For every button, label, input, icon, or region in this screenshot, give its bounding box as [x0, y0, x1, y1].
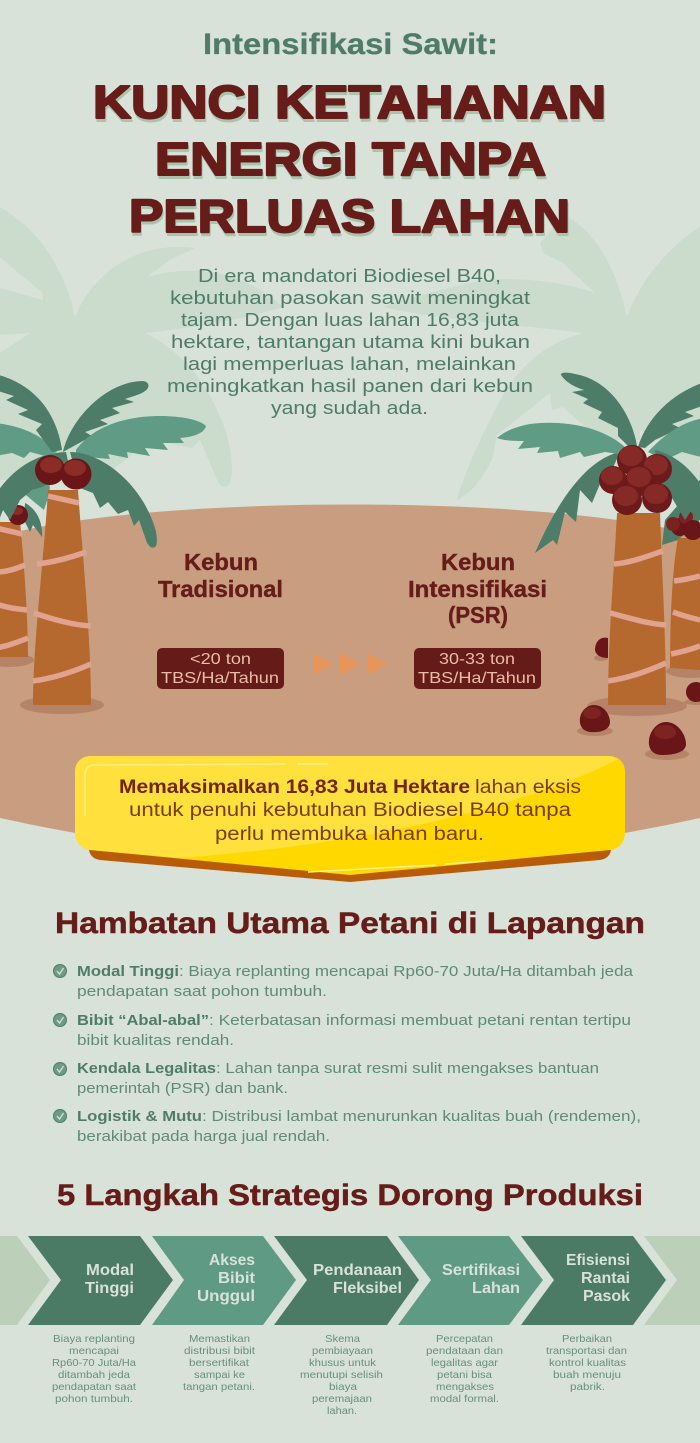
step description	[426, 1333, 503, 1405]
lower left leaf	[535, 452, 620, 553]
step 1	[28, 1236, 173, 1405]
step description: modal formal.	[430, 1393, 499, 1405]
trunk	[0, 522, 28, 657]
chevron	[398, 1236, 543, 1325]
step description	[546, 1333, 627, 1393]
intro paragraph: tajam. Dengan luas lahan 16,83 juta	[181, 309, 520, 330]
step description: Biaya replanting	[53, 1333, 135, 1345]
upper left leaf	[561, 373, 637, 446]
leaf	[662, 480, 700, 545]
back right palm	[662, 480, 700, 678]
step description	[183, 1333, 255, 1393]
step 5	[521, 1236, 666, 1393]
step description: mencapai	[69, 1345, 119, 1357]
trunk	[670, 538, 700, 670]
label: Intensifikasi	[408, 576, 547, 602]
item: legalitas: Kendala Legalitas	[77, 1060, 216, 1077]
fruit 4	[684, 682, 700, 705]
check icon	[54, 1014, 66, 1026]
back left palm	[0, 487, 50, 667]
check icon	[54, 1062, 66, 1076]
kicker: Intensifikasi Sawit:	[203, 28, 498, 61]
intro paragraph: lagi memperluas lahan, melainkan	[183, 353, 516, 374]
step description: khusus untuk	[309, 1357, 377, 1369]
item: bibit: bibit kualitas rendah.	[77, 1032, 234, 1049]
step description: mengakses	[436, 1381, 494, 1393]
headline: PERLUAS LAHAN	[129, 190, 570, 242]
step description: sampai ke	[194, 1369, 245, 1381]
step title	[85, 1262, 134, 1297]
right palm	[497, 373, 700, 716]
label: Tradisional	[158, 576, 283, 602]
lower right leaf	[70, 452, 157, 548]
step title: Modal	[86, 1262, 134, 1279]
chevron	[28, 1236, 173, 1325]
item: logistik: berakibat pada harga jual rendah.	[77, 1128, 330, 1145]
headline shadow: PERLUAS LAHAN	[130, 193, 571, 245]
chevron decor right	[644, 1236, 700, 1325]
item: bibit: Bibit “Abal-abal”	[77, 1012, 209, 1029]
step 3	[274, 1236, 419, 1417]
heading: strategy: 5 Langkah Strategis Dorong Produksi	[57, 1179, 643, 1212]
step title: Efisiensi	[566, 1252, 630, 1269]
small teal leaf	[26, 483, 50, 510]
step description: Skema	[325, 1333, 360, 1345]
headline: KUNCI KETAHANAN	[93, 76, 606, 128]
right teal leaf	[76, 416, 206, 459]
chevron	[521, 1236, 666, 1325]
check icon	[54, 1110, 66, 1122]
step description: bersertifikat	[189, 1357, 249, 1369]
label: Kebun	[441, 549, 515, 575]
item: modal tinggi: pendapatan saat pohon tumbuh.	[77, 983, 327, 1000]
step title	[313, 1262, 402, 1297]
faint background palm right	[383, 215, 700, 520]
heading: obstacles: Hambatan Utama Petani di Lapangan	[55, 907, 645, 940]
upper right leaf	[638, 382, 700, 448]
step 4	[398, 1236, 543, 1405]
intro paragraph: meningkatkan hasil panen dari kebun	[167, 375, 533, 396]
intro paragraph: hektare, tantangan utama kini bukan	[171, 331, 530, 352]
step description: Percepatan	[436, 1333, 493, 1345]
left teal leaf	[497, 423, 625, 458]
faint background palm left	[0, 207, 283, 487]
ground	[0, 504, 700, 857]
step title: Rantai	[581, 1270, 630, 1287]
callout banner	[75, 756, 625, 882]
right teal leaf	[648, 418, 700, 460]
item: logistik: : Distribusi lambat menurunkan kualitas buah (rendemen),	[202, 1108, 641, 1125]
step description: pohon tumbuh.	[55, 1393, 133, 1405]
intro paragraph: kebutuhan pasokan sawit meningkat	[170, 287, 530, 308]
step description: lahan.	[327, 1405, 357, 1417]
banner text	[119, 777, 581, 845]
step 2	[152, 1236, 296, 1393]
step description: pendapatan saat	[52, 1381, 136, 1393]
step description: Perbaikan	[562, 1333, 612, 1345]
item: modal tinggi: : Biaya replanting mencapai Rp60-70 Juta/Ha ditambah jeda	[179, 963, 634, 980]
dates cluster	[35, 455, 92, 490]
chevron	[152, 1236, 296, 1325]
chevron decor left	[0, 1236, 50, 1325]
headline shadow: KUNCI KETAHANAN	[94, 79, 607, 131]
dates	[666, 510, 700, 540]
yield badge	[157, 648, 284, 689]
step title	[197, 1252, 255, 1305]
banner body	[75, 756, 625, 875]
shadow	[0, 653, 34, 667]
yield badge: 30-33 ton	[439, 651, 515, 668]
step title: Fleksibel	[333, 1280, 402, 1297]
step description: distribusi bibit	[184, 1345, 255, 1357]
headline: ENERGI TANPA	[155, 133, 546, 185]
item: bibit	[54, 1012, 631, 1049]
step description	[300, 1333, 383, 1417]
title	[93, 28, 607, 245]
step title	[442, 1262, 520, 1297]
trunk bands	[608, 551, 666, 681]
item: logistik: Logistik & Mutu	[77, 1108, 202, 1125]
intro paragraph	[167, 265, 533, 418]
chevron	[274, 1236, 419, 1325]
check icon	[54, 964, 66, 978]
comparison: traditional	[157, 549, 284, 689]
dark leaf	[24, 503, 42, 537]
step description: Memastikan	[189, 1333, 250, 1345]
banner highlight	[75, 756, 618, 858]
step description: ditambah jeda	[58, 1369, 130, 1381]
trunk bands	[671, 576, 700, 654]
lower right leaf	[655, 450, 700, 520]
step description: kontrol kualitas	[549, 1357, 626, 1369]
step description: legalitas agar	[431, 1357, 499, 1369]
step description: buah menuju	[553, 1369, 621, 1381]
trunk bands	[33, 496, 91, 681]
step description: menutupi selisih	[300, 1369, 383, 1381]
step description: petani bisa	[437, 1369, 492, 1381]
item: legalitas	[54, 1060, 599, 1097]
dates cluster	[599, 445, 672, 515]
fallen fruit	[577, 638, 700, 760]
yield badge: TBS/Ha/Tahun	[418, 670, 536, 687]
banner text: untuk penuhi kebutuhan Biodiesel B40 tanpa	[129, 800, 571, 821]
comparison: intensified	[408, 549, 547, 689]
yield badge: TBS/Ha/Tahun	[161, 670, 279, 687]
yield badge	[414, 648, 541, 689]
upper left leaf	[0, 374, 62, 452]
step description: tangan petani.	[183, 1381, 255, 1393]
fruit 3	[645, 722, 689, 760]
banner text: lahan eksis	[475, 777, 581, 798]
item: bibit: : Keterbatasan informasi membuat petani rentan tertipu	[209, 1012, 631, 1029]
left palm	[0, 374, 206, 714]
step title: Unggul	[197, 1288, 255, 1305]
step description: pembiayaan	[312, 1345, 373, 1357]
label: (PSR)	[448, 602, 508, 628]
item: logistik	[54, 1108, 641, 1145]
label: Kebun	[184, 549, 258, 575]
step description: pendataan dan	[426, 1345, 503, 1357]
leaf teal	[26, 487, 50, 505]
headline shadow: ENERGI TANPA	[156, 136, 547, 188]
step description	[52, 1333, 136, 1405]
step description: Rp60-70 Juta/Ha	[52, 1357, 136, 1369]
step title	[566, 1252, 630, 1305]
fruit 2	[577, 705, 613, 736]
step title: Tinggi	[85, 1280, 134, 1297]
banner text: perlu membuka lahan baru.	[215, 824, 484, 845]
step title: Pasok	[583, 1288, 630, 1305]
yield badge: <20 ton	[190, 651, 251, 668]
intro paragraph: Di era mandatori Biodiesel B40,	[198, 265, 501, 286]
headline shadow	[94, 79, 607, 245]
step description: pabrik.	[570, 1381, 605, 1393]
left teal leaf	[0, 423, 57, 458]
arrows	[313, 653, 387, 675]
shadow	[666, 664, 700, 678]
item: modal tinggi: Modal Tinggi	[77, 963, 179, 980]
intro paragraph: yang sudah ada.	[271, 397, 428, 418]
banner gloss	[85, 764, 485, 872]
date	[8, 505, 28, 525]
trunk bands	[0, 528, 28, 648]
step title: Sertifikasi	[442, 1262, 520, 1279]
upper right leaf	[63, 381, 148, 452]
trunk	[608, 513, 666, 705]
fruit 1	[594, 638, 608, 661]
step title: Bibit	[218, 1270, 255, 1287]
shadow	[20, 696, 104, 714]
banner text: Memaksimalkan 16,83 Juta Hektare	[119, 777, 470, 798]
step title: Lahan	[472, 1280, 520, 1297]
step description: transportasi dan	[546, 1345, 627, 1357]
headline	[93, 76, 606, 242]
shadow	[587, 696, 687, 716]
lower left leaf	[0, 452, 70, 530]
trunk	[33, 490, 91, 705]
step description: biaya	[329, 1381, 357, 1393]
step description: peremajaan	[312, 1393, 372, 1405]
obstacles list	[54, 963, 641, 1145]
ribbon	[89, 850, 611, 882]
step title: Akses	[209, 1252, 255, 1269]
item: legalitas: pemerintah (PSR) dan bank.	[77, 1080, 288, 1097]
label	[158, 549, 283, 602]
step title: Pendanaan	[313, 1262, 402, 1279]
label	[408, 549, 547, 628]
item: modal tinggi	[54, 963, 634, 1000]
item: legalitas: : Lahan tanpa surat resmi sulit mengakses bantuan	[216, 1060, 599, 1077]
